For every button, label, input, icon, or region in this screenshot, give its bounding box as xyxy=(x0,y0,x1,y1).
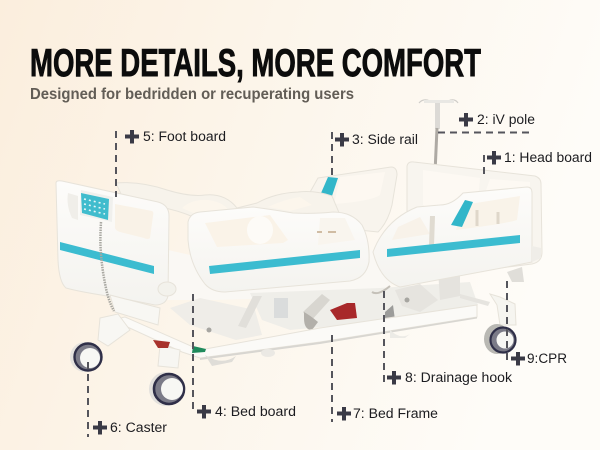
callout: 3 side rail xyxy=(332,132,418,176)
far side rail control panel xyxy=(318,177,338,202)
middle rail stripe xyxy=(209,250,360,274)
foot board window xyxy=(115,204,153,239)
callout: 9 CPR xyxy=(507,281,567,366)
callout: 3 side rail: 3: Side rail xyxy=(352,132,418,147)
callout: 7 bed frame xyxy=(332,335,438,422)
hospital bed illustration xyxy=(56,100,542,406)
near side rail xyxy=(373,187,532,287)
front caster xyxy=(149,372,184,406)
right caster xyxy=(484,324,516,354)
callout: 9 CPR: 9:CPR xyxy=(527,351,567,366)
bed frame xyxy=(98,294,516,368)
foot board handle xyxy=(158,282,176,296)
callout: 5 foot board xyxy=(116,129,226,197)
middle side rail xyxy=(188,207,369,292)
callout: 8 drainage hook xyxy=(384,291,512,385)
callout: 4 bed board xyxy=(193,294,296,419)
green lever xyxy=(192,346,206,353)
far foot rail xyxy=(116,183,340,220)
red lever xyxy=(330,303,357,320)
head board handle xyxy=(532,246,541,262)
callout: 1 head board xyxy=(484,150,592,174)
bracket xyxy=(507,267,524,282)
mattress deck xyxy=(165,250,400,300)
far side rail xyxy=(300,167,397,232)
under-bed mechanism xyxy=(170,270,478,340)
small red lever xyxy=(153,340,170,348)
foot board stripe xyxy=(60,242,154,274)
foot board bracket xyxy=(110,295,160,325)
callout: 6 caster xyxy=(88,362,168,437)
callout: 5 foot board: 5: Foot board xyxy=(143,129,226,144)
back caster xyxy=(70,342,102,372)
subtitle: Designed for bedridden or recuperating users xyxy=(30,86,354,103)
head board xyxy=(407,162,542,268)
callout: 1 head board: 1: Head board xyxy=(504,150,592,165)
foot board xyxy=(56,181,169,305)
callout: 2 iV pole: 2: iV pole xyxy=(477,112,535,127)
middle rail window xyxy=(205,215,288,247)
near rail stripe xyxy=(387,235,520,257)
callout: 2 iV pole xyxy=(438,112,535,132)
callout: 7 bed frame: 7: Bed Frame xyxy=(353,406,438,421)
near rail control panel xyxy=(451,200,473,227)
near rail windows xyxy=(456,196,520,230)
callout: 8 drainage hook: 8: Drainage hook xyxy=(405,370,512,385)
hand controller xyxy=(80,190,114,311)
callout: 4 bed board: 4: Bed board xyxy=(215,404,296,419)
iV pole xyxy=(419,100,458,240)
callout: 6 caster: 6: Caster xyxy=(110,420,168,435)
